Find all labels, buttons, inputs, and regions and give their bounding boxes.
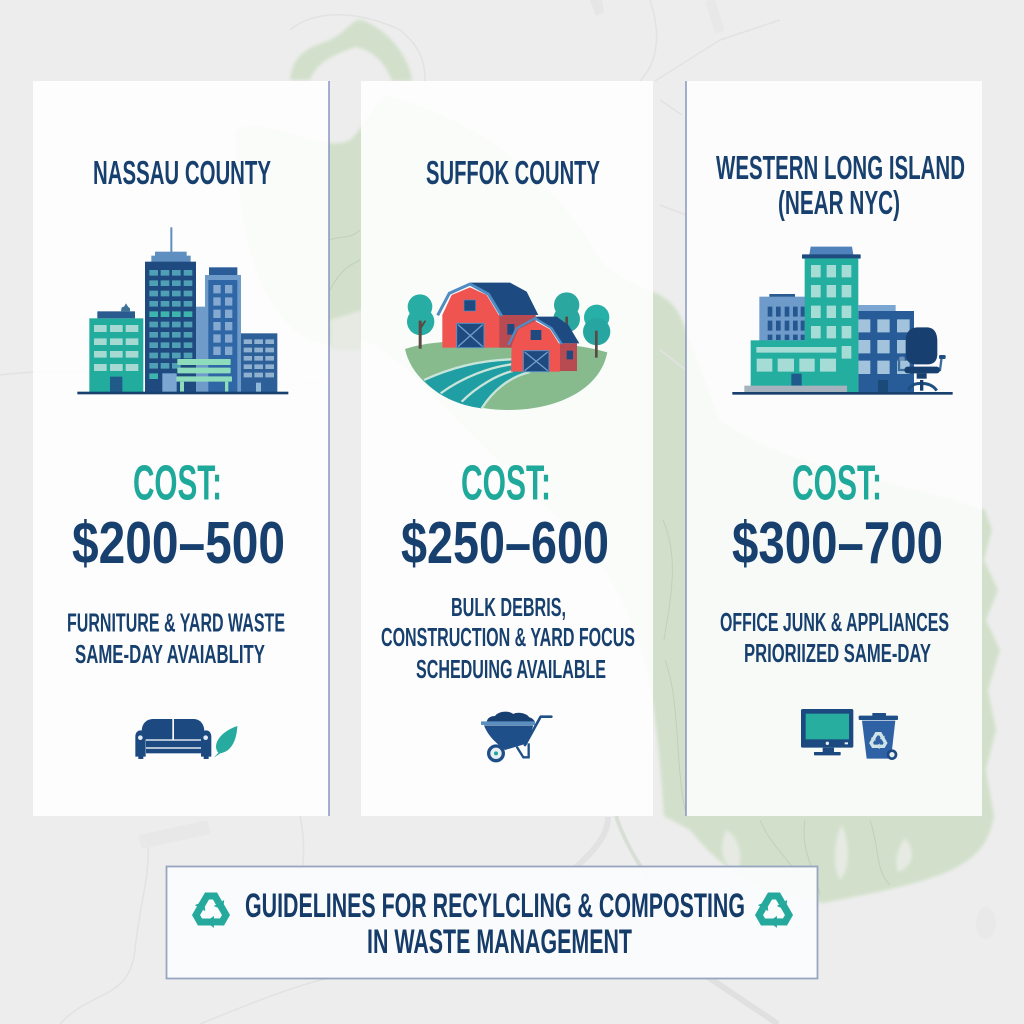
description: BULK DEBRIS, (451, 592, 566, 622)
cost range: $250–600 (401, 510, 609, 576)
icon: recycling symbol left (191, 896, 229, 930)
cost label: COST: (792, 456, 882, 510)
description (720, 607, 949, 668)
icon: barns on farmland (405, 283, 610, 410)
icon: recycling symbol right (754, 896, 792, 930)
cost label: COST: (133, 456, 222, 510)
description: CONSTRUCTION & YARD FOCUS (381, 622, 635, 652)
banner: recycling guidelines (166, 866, 818, 978)
description (67, 608, 285, 669)
panel: Suffolk County (361, 81, 653, 816)
description: SCHEDUING AVAILABLE (416, 654, 606, 684)
heading: Nassau County: NASSAU COUNTY (93, 154, 271, 191)
icon: wheelbarrow (481, 712, 551, 761)
cost range: $200–500 (72, 510, 285, 576)
banner text: IN WASTE MANAGEMENT (367, 923, 632, 961)
panel: Nassau County (33, 81, 329, 816)
heading: Western Long Island: (NEAR NYC) (778, 184, 900, 221)
icon: office buildings and chair (732, 247, 953, 395)
description: FURNITURE & YARD WASTE (67, 608, 285, 638)
cost label: COST: (461, 456, 551, 510)
description (381, 592, 635, 684)
icon: sofa and leaf (135, 719, 237, 759)
banner text: GUIDELINES FOR RECYLCLING & COMPOSTING (245, 887, 745, 925)
heading: Suffolk County: SUFFOK COUNTY (426, 154, 600, 191)
icon: computer and recycling bin (801, 709, 898, 759)
gaps in green areas (330, 310, 912, 880)
panel: Western Long Island (686, 81, 982, 816)
banner text (245, 887, 745, 961)
description: SAME-DAY AVAIABLITY (75, 639, 265, 669)
icon: city skyline with bench (77, 227, 288, 394)
heading: Western Long Island (716, 149, 965, 221)
cost range: $300–700 (732, 510, 943, 576)
